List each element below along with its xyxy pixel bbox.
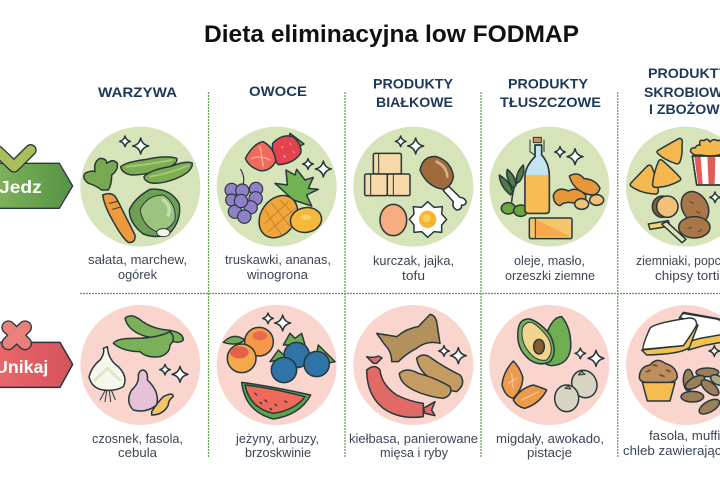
panel: owoce unikaj bbox=[217, 305, 337, 425]
heading: produkty tłuszczowe bbox=[500, 76, 601, 110]
heading: produkty białkowe: BIAŁKOWE bbox=[376, 94, 453, 110]
icon: sparkles bbox=[120, 136, 149, 154]
label: migdały: pistacje bbox=[527, 446, 572, 460]
label: truskawki: winogrona bbox=[246, 268, 308, 282]
icon: pineapple bbox=[251, 169, 324, 245]
label: truskawki: truskawki, ananas, bbox=[225, 253, 331, 267]
label: fasola bbox=[623, 429, 720, 458]
icon: lettuce bbox=[129, 189, 180, 237]
icon: sparkle bbox=[710, 192, 720, 203]
icon: tofu bbox=[365, 153, 410, 196]
badge: unikaj bbox=[0, 327, 73, 387]
icon: peanuts bbox=[553, 174, 604, 209]
icon: watermelon bbox=[242, 382, 311, 419]
label: migdały: migdały, awokado, bbox=[496, 432, 604, 446]
panel: białkowe unikaj bbox=[353, 305, 473, 425]
panel: owoce jedz bbox=[217, 127, 337, 247]
title: Dieta eliminacyjna low FODMAP bbox=[204, 21, 579, 48]
label: ziemniaki bbox=[636, 254, 720, 283]
heading: produkty białkowe: PRODUKTY bbox=[373, 76, 454, 92]
label: kiełbasa: mięsa i ryby bbox=[380, 446, 449, 460]
icon: butter bbox=[529, 218, 572, 239]
icon: strawberries bbox=[245, 133, 304, 171]
icon: carrot bbox=[84, 158, 135, 242]
icon: sparkles bbox=[303, 159, 331, 177]
icon: popcorn bbox=[691, 139, 720, 185]
heading: owoce: OWOCE bbox=[249, 83, 307, 99]
icon: pistachios bbox=[555, 366, 601, 412]
label: kiełbasa: kiełbasa, panierowane bbox=[349, 432, 478, 446]
badge: jedz bbox=[0, 150, 73, 208]
label: kurczak: tofu bbox=[402, 269, 425, 283]
icon: sparkles bbox=[160, 364, 188, 382]
icon: fries bbox=[648, 221, 686, 243]
panel: tłuszczowe unikaj bbox=[489, 305, 609, 425]
heading: produkty białkowe bbox=[373, 76, 454, 110]
panel: skrobiowe jedz bbox=[626, 127, 720, 247]
icon: chicken leg bbox=[420, 156, 466, 210]
panel: białkowe jedz bbox=[353, 127, 473, 247]
icon: tortilla chips bbox=[630, 138, 682, 194]
label: sałata: sałata, marchew, bbox=[88, 253, 187, 267]
heading: warzywa: WARZYWA bbox=[98, 84, 177, 100]
label: oleje: orzeszki ziemne bbox=[505, 269, 595, 283]
label: jeżyny bbox=[235, 432, 319, 460]
icon: peaches bbox=[223, 327, 273, 373]
label: oleje bbox=[505, 254, 595, 283]
icon: sparkles bbox=[263, 313, 291, 331]
icon: green beans bbox=[113, 316, 183, 357]
icon: sparkles bbox=[395, 136, 424, 154]
label: kiełbasa bbox=[349, 432, 478, 460]
icon: garlic bbox=[129, 370, 173, 415]
icon: egg bbox=[380, 204, 407, 236]
badge: jedz: Jedz bbox=[0, 177, 42, 197]
label: truskawki bbox=[225, 253, 331, 282]
icon: breaded sticks bbox=[399, 355, 463, 398]
icon: bread bbox=[642, 312, 720, 355]
icon: potatoes bbox=[652, 187, 714, 238]
label: migdały bbox=[496, 432, 604, 460]
icon: sausage bbox=[367, 356, 435, 417]
label: kurczak bbox=[373, 254, 454, 283]
icon: fried egg bbox=[409, 202, 447, 237]
label: czosnek: cebula bbox=[118, 446, 157, 460]
icon: onion bbox=[89, 347, 125, 402]
icon: cucumbers bbox=[121, 157, 192, 183]
icon: breaded fish bbox=[377, 314, 440, 362]
icon: oil bottle bbox=[525, 137, 549, 213]
label: czosnek bbox=[92, 432, 183, 460]
panel: warzywa unikaj bbox=[80, 305, 200, 425]
heading: produkty tłuszczowe: PRODUKTY bbox=[508, 76, 589, 92]
label: oleje: oleje, masło, bbox=[514, 254, 585, 268]
icon: sparkles bbox=[439, 346, 466, 364]
label: czosnek: czosnek, fasola, bbox=[92, 432, 183, 446]
column dividers bbox=[80, 92, 720, 458]
label: sałata bbox=[88, 253, 187, 282]
icon: olive branch bbox=[499, 165, 528, 216]
icon: blueberries bbox=[270, 333, 335, 383]
label: kurczak: kurczak, jajka, bbox=[373, 254, 454, 268]
label: jeżyny: brzoskwinie bbox=[245, 446, 311, 460]
icon: sparkles bbox=[575, 348, 604, 366]
panel: warzywa jedz bbox=[80, 127, 200, 247]
heading: produkty tłuszczowe: TŁUSZCZOWE bbox=[500, 94, 601, 110]
icon: grapes bbox=[225, 169, 263, 223]
icon: almonds bbox=[502, 361, 547, 408]
icon: sparkles bbox=[555, 147, 583, 165]
label: sałata: ogórek bbox=[118, 268, 158, 282]
panel: tłuszczowe jedz bbox=[489, 127, 609, 247]
icon: beans bbox=[681, 368, 720, 417]
icon: muffin bbox=[639, 360, 677, 401]
label: jeżyny: jeżyny, arbuzy, bbox=[235, 432, 319, 446]
heading: produkty skrobiowe i zbożowe bbox=[644, 65, 720, 117]
icon: avocado bbox=[518, 317, 571, 366]
icon: sparkle bbox=[709, 346, 720, 356]
panel: skrobiowe unikaj bbox=[626, 305, 720, 425]
